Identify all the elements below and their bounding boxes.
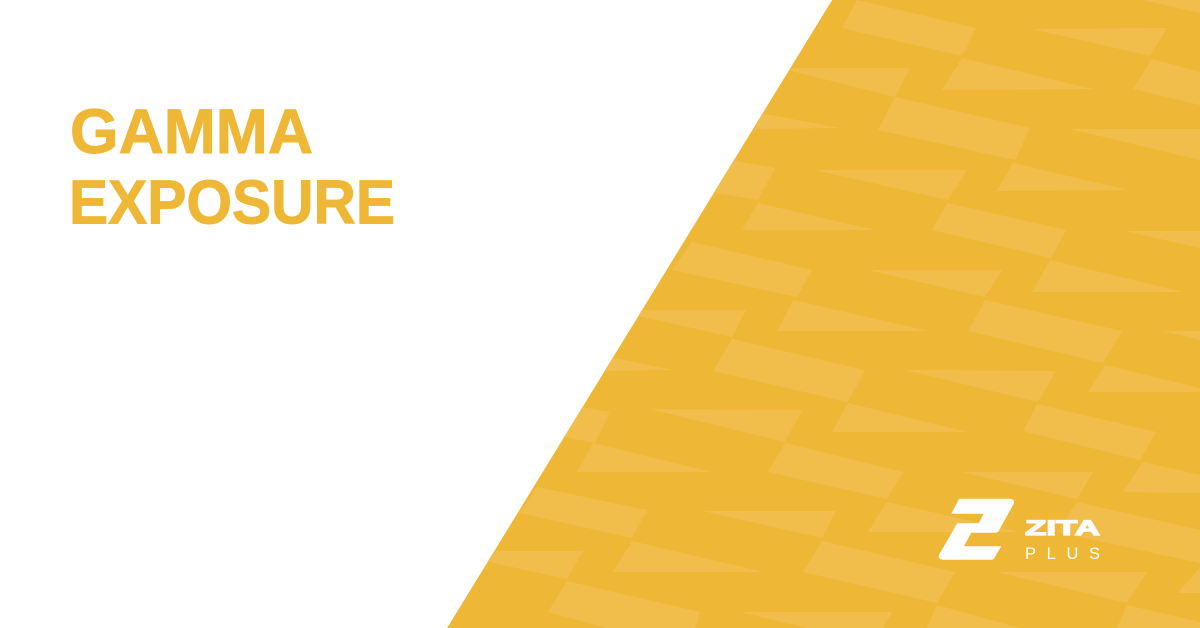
title line: GAMMA: GAMMA bbox=[70, 97, 313, 167]
wordmark: PLUS: PLUS bbox=[1025, 545, 1100, 563]
icon: Z mark bbox=[939, 499, 1014, 560]
title bbox=[69, 97, 395, 238]
wordmark: ZITA: ZITA bbox=[1025, 517, 1100, 540]
pattern: lighter angled blocks bbox=[480, 0, 1200, 628]
logo: Zita Plus bbox=[939, 499, 1100, 563]
panel: diagonal yellow panel bbox=[447, 0, 1200, 628]
title line: EXPOSURE: EXPOSURE bbox=[69, 168, 395, 238]
